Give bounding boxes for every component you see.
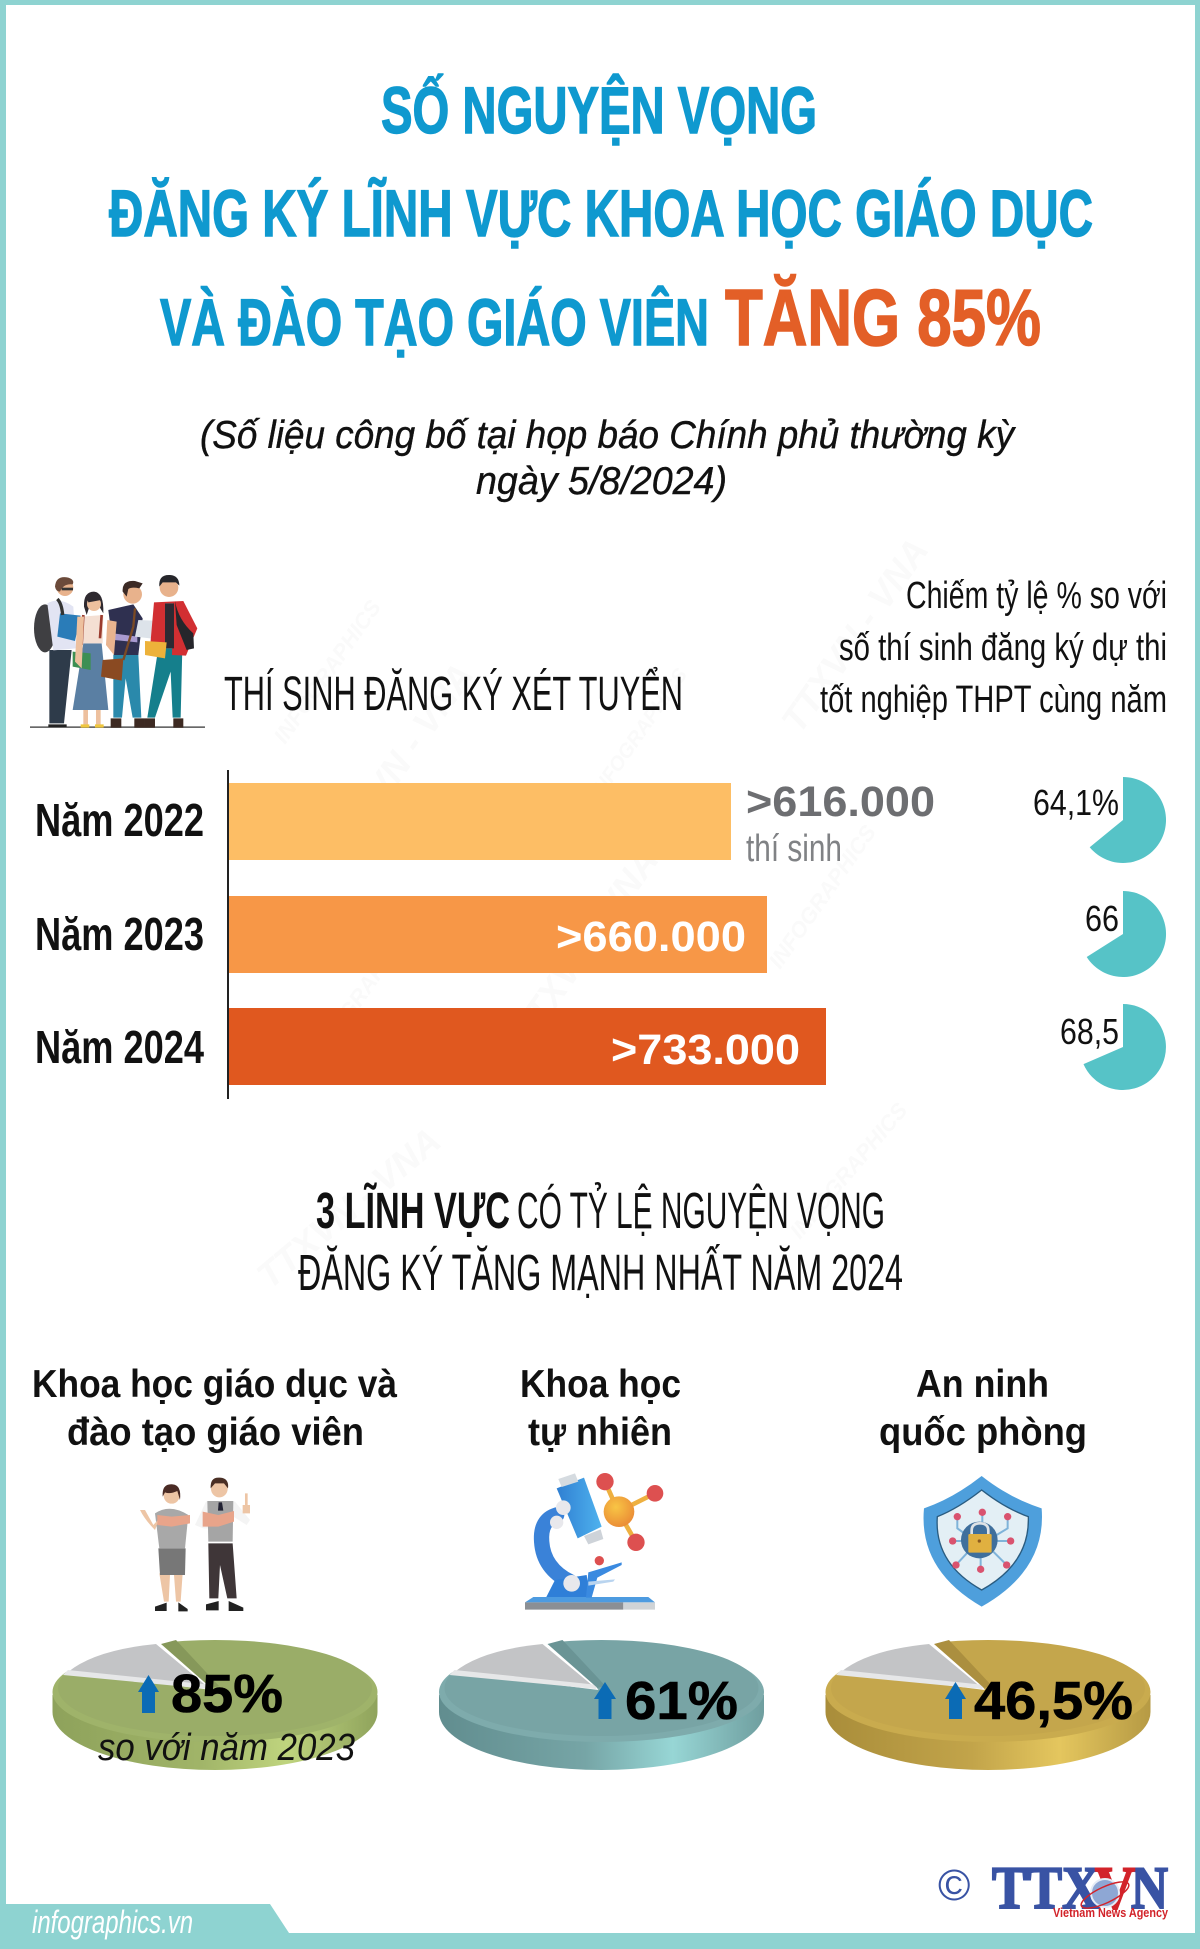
text: INFOGRAPHICS [764,820,881,973]
section heading: three fields: 3 LĨNH VỰC [316,1181,510,1239]
value: 61%: 61% [625,1671,738,1731]
heading: education [32,1363,397,1454]
logo: TTXVN: V [1095,1855,1135,1921]
bar 2022 [35,778,935,870]
bar 2023 [35,896,767,973]
bar 2024: Năm 2024 [35,1021,204,1073]
panel: security and defense [813,1363,1150,1770]
bar 2024 [35,1008,826,1085]
logo: TTXVN: © [938,1861,970,1910]
logo: TTXVN: N [1131,1855,1168,1921]
pie 3D: 46,5% [813,1630,1150,1770]
value: 85%: 85% [171,1664,283,1724]
section heading: candidates: THÍ SINH ĐĂNG KÝ XÉT TUYỂN [224,667,683,721]
logo: TTXVN: Vietnam News Agency [1053,1905,1169,1920]
title: TĂNG 85% [725,273,1041,362]
bar 2022: Năm 2022 [35,794,204,846]
subtitle: ngày 5/8/2024) [476,460,727,503]
heading: security and defense: quốc phòng [879,1411,1087,1454]
heading: security and defense [879,1363,1087,1454]
pie: 66: 66 [1085,898,1119,939]
pie: 64,1% [1033,777,1166,863]
icon: shield with lock [924,1476,1042,1607]
section heading: three fields: CÓ TỶ LỆ NGUYỆN VỌNG [517,1181,885,1239]
heading: security and defense: An ninh [916,1363,1049,1406]
pie: 68,5: 68,5 [1060,1011,1119,1052]
subtitle: (Số liệu công bố tại họp báo Chính phủ thường kỳ [200,414,1016,457]
text: TTXVN - VNA [249,1119,448,1296]
panel: natural sciences [426,1363,764,1770]
bar 2023: Năm 2023 [35,908,204,960]
title: SỐ NGUYỆN VỌNG [381,73,817,147]
section heading: three fields [298,1181,903,1301]
icon: group of students [30,575,205,728]
heading: natural sciences: tự nhiên [528,1411,672,1454]
title: VÀ ĐÀO TẠO GIÁO VIÊN [160,285,709,359]
icon: microscope and molecule [525,1473,663,1610]
arrow up [594,1682,616,1719]
pie 3D: 61% [426,1630,764,1770]
text: TTXVN - VNA [318,656,481,865]
bar 2022: thí sinh [746,828,842,870]
panel: education and teacher training [32,1363,397,1770]
pie: 66 [1085,891,1166,977]
bar 2023: >660.000 [556,913,746,961]
arrow up [138,1675,159,1713]
bar chart [35,770,935,1099]
logo: TTXVN: TTX [992,1855,1100,1921]
subtitle [200,414,1016,503]
text: TTXVN - VNA [773,531,936,740]
text: INFOGRAPHICS [269,595,386,748]
text: INFOGRAPHICS [785,1098,912,1243]
heading: education: Khoa học giáo dục và [32,1363,397,1406]
note: compared with 2023: so với năm 2023 [98,1727,355,1769]
title [109,73,1093,362]
bar 2022: >616.000 [746,778,935,826]
pie: 64,1%: 64,1% [1033,782,1119,823]
bar 2024: >733.000 [611,1026,800,1074]
text: INFOGRAPHICS [304,915,421,1068]
pie 3D: 85% [40,1630,378,1770]
value: 46,5%: 46,5% [974,1671,1133,1731]
footer tab: infographics.vn: infographics.vn [32,1904,193,1940]
heading: education: đào tạo giáo viên [67,1411,364,1454]
pie: 68,5 [1060,1004,1166,1090]
text: INFOGRAPHICS [586,664,692,803]
heading: natural sciences [520,1363,681,1454]
logo: TTXVN [938,1855,1169,1921]
arrow up [945,1682,966,1719]
text: share note [820,575,1167,721]
icon: teachers [140,1478,250,1611]
text: TTXVN - VNA [503,841,666,1050]
heading: natural sciences: Khoa học [520,1363,681,1406]
